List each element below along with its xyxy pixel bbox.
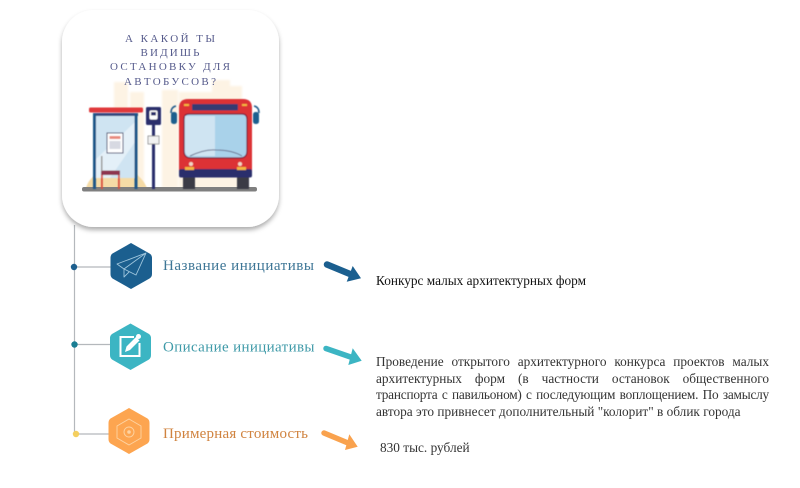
text: initiative description value: Проведение открытого архитектурного конкурса проектов малых: [376, 354, 769, 369]
card title: А КАКОЙ ТЫ: [125, 33, 215, 45]
timeline vertical line: [74, 225, 76, 434]
text: initiative description value: [376, 354, 770, 419]
heading: initiative name: Название инициативы: [163, 258, 314, 274]
illustration: bus stop sign: [146, 107, 161, 189]
heading: approximate cost: Примерная стоимость: [163, 426, 308, 442]
text: initiative description value: транспорта с павильоном) с последующим воплощением. По замыслу: [376, 387, 769, 402]
text: initiative description value: автора это привнесет дополнительный "колорит" в облик города: [376, 404, 741, 418]
text: initiative name value: Конкурс малых архитектурных форм: [376, 273, 586, 288]
arrow: teal: [326, 348, 362, 365]
illustration: ground: [82, 187, 257, 192]
row 3 connector and dot: [73, 431, 109, 437]
card title: ВИДИШЬ: [140, 47, 200, 59]
card title: ОСТАНОВКУ ДЛЯ: [110, 61, 231, 73]
illustration: bus shelter: [89, 108, 143, 189]
illustration: city skyline: [114, 80, 242, 188]
card title: [110, 33, 231, 88]
card: bus stop illustration: [62, 10, 279, 227]
illustration: bushes: [86, 168, 147, 188]
arrow: blue: [327, 264, 361, 282]
heading: initiative description: Описание инициативы: [163, 340, 314, 356]
text: cost value: 830 тыс. рублей: [380, 440, 470, 455]
row 1 connector and dot: [71, 264, 112, 270]
illustration: bus: [171, 99, 259, 189]
row 2 connector and dot: [71, 341, 110, 348]
text: initiative description value: архитектурных форм (в частности остановок общественного: [376, 370, 769, 386]
card title: АВТОБУСОВ?: [124, 76, 216, 88]
icon: nested hexagons on orange hexagon: [108, 408, 150, 454]
icon: edit note on teal hexagon: [110, 324, 151, 370]
icon: paper plane on blue hexagon: [110, 243, 152, 289]
arrow: orange: [324, 433, 358, 450]
